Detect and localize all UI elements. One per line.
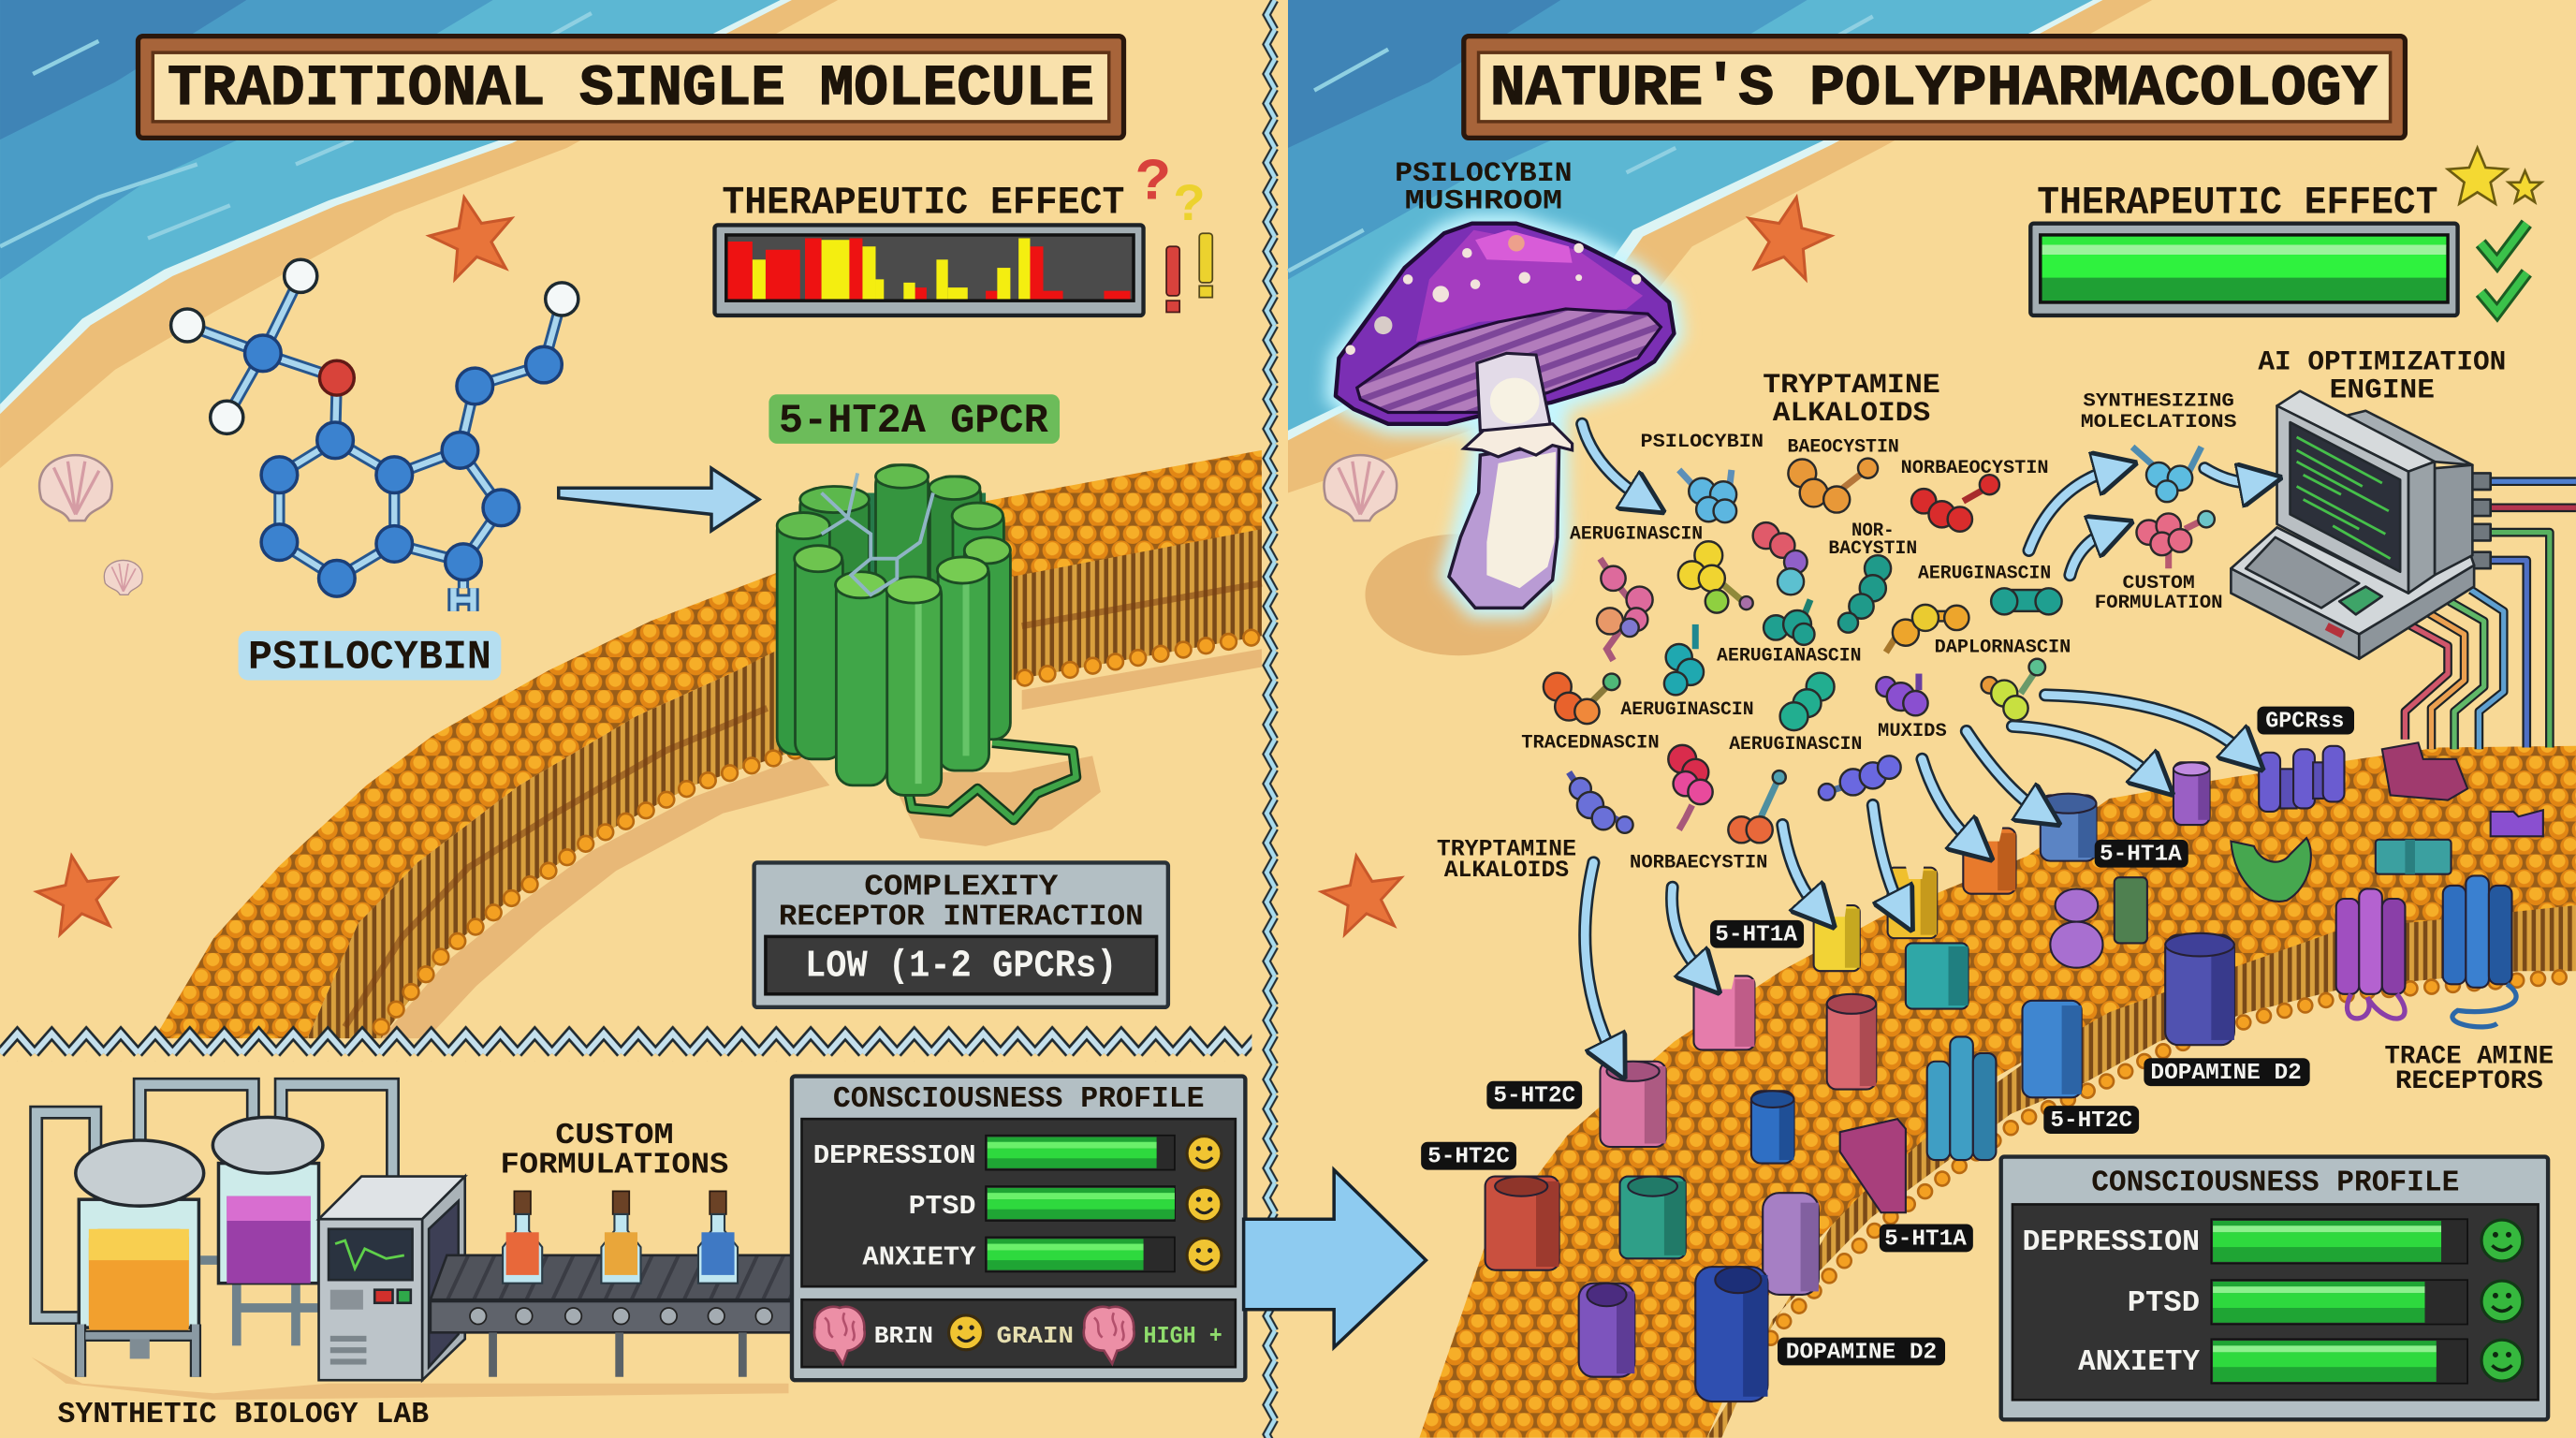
molecule: psilocybin blue <box>1679 470 1736 522</box>
right cell membrane <box>1419 746 2576 1438</box>
left consciousness profile: CONSCIOUSNESS PROFILE <box>833 1083 1204 1116</box>
receptor callout tags: 5-HT2C <box>2050 1108 2132 1134</box>
molecule: teal dumbbell <box>1991 588 2062 614</box>
molecule: blue violet <box>1569 772 1633 833</box>
custom formulations label <box>500 1120 728 1181</box>
molecule name labels: FORMULATION <box>2095 593 2223 614</box>
5-HT2A GPCR receptor bundle <box>777 465 1076 820</box>
mushroom glow <box>1336 224 1674 608</box>
left therapeutic effect meter: THERAPEUTIC EFFECT <box>722 180 1124 225</box>
receptor: top blue <box>2041 794 2096 861</box>
complexity panel: LOW (1-2 GPCRs) <box>805 945 1117 988</box>
computer connectors <box>2471 473 2491 568</box>
molecule: teal lower <box>1664 624 1704 695</box>
vertical zigzag divider <box>1251 0 1288 1438</box>
receptor: salmon <box>1827 994 1876 1090</box>
AI optimization engine label: ENGINE <box>2330 374 2435 405</box>
molecule: orange red <box>1544 673 1620 724</box>
molecule name labels: NOR- <box>1852 521 1895 542</box>
receptor: green <box>2231 838 2311 902</box>
ptsd row <box>909 1186 1222 1222</box>
orange vessel <box>76 1140 204 1377</box>
psilocybin label: PSILOCYBIN <box>248 635 491 682</box>
complexity panel <box>754 862 1168 1007</box>
anxiety row <box>862 1238 1222 1273</box>
receptor: purple notch <box>2491 810 2543 836</box>
decorative starfish and shell, right <box>1316 189 1837 937</box>
receptor callout tags: 5-HT1A <box>1884 1226 1968 1252</box>
lower stem <box>1449 444 1559 608</box>
icons: question and exclamation marks <box>1135 149 1212 312</box>
depression row: DEPRESSION <box>2022 1226 2200 1259</box>
cap <box>1336 224 1674 424</box>
molecule name labels: BAEOCYSTIN <box>1788 436 1899 458</box>
molecule name labels: MUXIDS <box>1878 721 1947 742</box>
molecule name labels: ALKALOIDS <box>1773 397 1930 429</box>
molecule name labels: AERUGINASCIN <box>1570 523 1703 545</box>
gills <box>1357 309 1661 413</box>
receptor: red <box>1486 1177 1559 1270</box>
left beach ocean <box>0 0 838 468</box>
transition arrow <box>1244 1170 1426 1347</box>
brain grain high legend: BRIN <box>874 1323 933 1350</box>
icons: stars and check marks <box>2448 148 2541 312</box>
molecule name labels: NORBAEOCYSTIN <box>1901 458 2049 479</box>
custom formulations label: CUSTOM <box>555 1120 674 1152</box>
analyzer machine <box>319 1177 465 1380</box>
colourful alkaloid molecules <box>1544 447 2215 843</box>
molecule name labels: SYNTHESIZING <box>2083 390 2234 412</box>
molecule: baeocystin orange <box>1788 459 1878 513</box>
receptor: indigo <box>2165 933 2234 1045</box>
receptor callout tags: GPCRss <box>2265 709 2344 734</box>
left therapeutic effect meter <box>714 180 1144 315</box>
receptor: lavender <box>1763 1193 1819 1295</box>
computer base <box>2231 568 2359 659</box>
receptor: bright blue <box>2022 1001 2082 1097</box>
receptor callout tags: 5-HT1A <box>2100 843 2183 868</box>
molecule name labels <box>1437 369 2237 884</box>
AI optimization engine computer <box>2231 391 2576 749</box>
molecule name labels: AERUGINASCIN <box>1620 699 1754 721</box>
lab pipes <box>37 1084 393 1318</box>
psilocybin molecule <box>171 259 578 611</box>
receptor callout tags: 5-HT2C <box>1427 1145 1510 1170</box>
receptor: gold <box>1888 866 1937 938</box>
molecule: custom formulation pink <box>2136 511 2215 568</box>
trace amine receptors label: TRACE AMINE <box>2384 1043 2554 1072</box>
molecule name labels: MOLECLATIONS <box>2081 412 2237 433</box>
computer monitor <box>2346 411 2472 465</box>
molecule: red pink <box>1668 745 1713 829</box>
receptor: trace amine blue <box>2443 875 2516 1027</box>
molecule name labels: AERUGINASCIN <box>1729 734 1862 756</box>
cap spots <box>1345 235 1641 355</box>
conveyor belt <box>431 1255 792 1377</box>
psilocybin mushroom <box>1336 224 1674 655</box>
molecule: orange chain <box>1728 770 1786 843</box>
synthetic biology lab label: SYNTHETIC BIOLOGY LAB <box>57 1399 429 1431</box>
psilocybin mushroom label <box>1395 157 1573 217</box>
complexity panel: RECEPTOR INTERACTION <box>779 901 1144 933</box>
formulation bottles <box>503 1191 738 1284</box>
decorative starfish and shells, left <box>32 189 521 937</box>
molecule name labels: BACYSTIN <box>1828 538 1917 560</box>
arrow: molecule to receptor <box>559 468 759 531</box>
receptor callout tags: 5-HT1A <box>1715 923 1798 948</box>
molecule: yellow lime <box>1678 541 1753 613</box>
icons: question and exclamation marks: ? <box>1135 149 1171 216</box>
depression row <box>813 1136 1222 1171</box>
molecule: lime <box>1982 659 2045 721</box>
molecule name labels: TRYPTAMINE <box>1763 369 1940 401</box>
molecule name labels: DAPLORNASCIN <box>1935 638 2071 659</box>
right therapeutic effect meter: THERAPEUTIC EFFECT <box>2037 180 2438 225</box>
purple vessel <box>200 1117 323 1345</box>
right therapeutic effect meter <box>2030 180 2458 315</box>
molecule: teal chain upper <box>1838 555 1891 633</box>
membrane receptors <box>1486 742 2543 1401</box>
receptor: navy <box>1695 1267 1767 1401</box>
trace amine receptors label: RECEPTORS <box>2395 1067 2543 1096</box>
depression row <box>2022 1219 2523 1264</box>
molecule name labels: TRYPTAMINE <box>1437 837 1576 862</box>
receptor: teal green <box>1620 1177 1686 1258</box>
upper stem <box>1477 353 1551 431</box>
title: traditional single molecule: TRADITIONAL SINGLE MOLECULE <box>168 57 1094 122</box>
molecule: red purple cyan <box>1753 522 1808 594</box>
title: nature's polypharmacology: NATURE'S POLYPHARMACOLOGY <box>1490 57 2378 122</box>
molecule name labels: CUSTOM <box>2123 573 2195 594</box>
molecule: violet blue <box>1819 756 1901 800</box>
ptsd row <box>2128 1280 2523 1325</box>
title: nature's polypharmacology <box>1464 37 2405 138</box>
receptor: yellow <box>1814 903 1860 971</box>
receptor callout tags: DOPAMINE D2 <box>2150 1061 2302 1086</box>
stem ruffle <box>1464 424 1573 457</box>
anxiety row <box>2078 1339 2523 1384</box>
receptor: orange <box>1963 827 2015 894</box>
molecule: norbaeocystin red <box>1911 475 1999 532</box>
molecule name labels: AERUGINASCIN <box>1918 564 2051 585</box>
molecule: synthesized cyan <box>2132 447 2202 502</box>
curved pathway arrows <box>1582 424 2261 1060</box>
receptor: blue small <box>1751 1091 1794 1164</box>
molecule name labels: AERUGIANASCIN <box>1717 645 1862 667</box>
receptor: maroon blob <box>2382 742 2467 800</box>
receptor: small purple <box>2174 762 2210 825</box>
icons: question and exclamation marks: ? <box>1174 176 1206 236</box>
lab shadow <box>31 1357 788 1400</box>
receptor: olive <box>2115 877 2147 943</box>
molecule: purple <box>1876 674 1928 715</box>
right consciousness profile <box>2001 1157 2548 1419</box>
5-HT2A GPCR label: 5-HT2A GPCR <box>779 398 1048 445</box>
title: traditional single molecule <box>138 37 1123 138</box>
receptor: trace amine purple <box>2336 888 2405 1019</box>
brain grain high legend <box>814 1307 1222 1364</box>
computer cables <box>2405 481 2576 749</box>
brain grain high legend: GRAIN <box>996 1323 1074 1350</box>
receptor: light pink <box>1600 1062 1666 1147</box>
brain grain high legend: HIGH + <box>1144 1323 1222 1350</box>
receptor: teal blue bundle <box>1927 1036 1996 1160</box>
molecule name labels: ALKALOIDS <box>1444 858 1569 884</box>
AI optimization engine label: AI OPTIMIZATION <box>2258 346 2506 378</box>
trace amine receptors label <box>2384 1043 2554 1096</box>
receptor callout tags: 5-HT2C <box>1493 1084 1575 1109</box>
docked molecule inside receptor <box>822 473 933 594</box>
right beach ocean <box>1288 0 2152 493</box>
custom formulations label: FORMULATIONS <box>500 1149 728 1181</box>
anxiety row: ANXIETY <box>862 1242 976 1273</box>
complexity panel: COMPLEXITY <box>864 872 1058 904</box>
ptsd row: PTSD <box>2128 1287 2200 1320</box>
receptor: lilac pair <box>2050 888 2102 968</box>
ptsd row: PTSD <box>909 1191 976 1222</box>
receptor: purple <box>1579 1284 1634 1377</box>
receptor callout tags: DOPAMINE D2 <box>1786 1340 1937 1365</box>
left cell membrane <box>154 450 1262 1038</box>
molecule: teal chain middle <box>1764 600 1814 645</box>
left consciousness profile <box>792 1077 1245 1380</box>
mushroom shadow <box>1365 534 1553 655</box>
receptor: magenta <box>1840 1119 1906 1212</box>
depression row: DEPRESSION <box>813 1140 976 1171</box>
molecule name labels: TRACEDNASCIN <box>1521 732 1660 754</box>
receptor callout tags <box>1421 707 2354 1365</box>
psilocybin mushroom label: PSILOCYBIN <box>1395 157 1573 189</box>
receptor: teal notch <box>1906 943 1969 1009</box>
anxiety row: ANXIETY <box>2078 1346 2200 1379</box>
receptor: violet bundle <box>2259 746 2344 812</box>
psilocybin mushroom label: MUSHROOM <box>1405 185 1562 217</box>
synthetic biology lab <box>31 1084 792 1400</box>
molecule name labels: PSILOCYBIN <box>1640 432 1764 453</box>
receptor: flat teal <box>2376 840 2452 874</box>
horizontal zigzag divider <box>0 1025 1251 1062</box>
molecule: sea green <box>1780 673 1835 730</box>
molecule: daplornascin yellow orange <box>1886 605 1969 653</box>
receptor tail loop <box>909 742 1076 820</box>
AI optimization engine label <box>2258 346 2506 405</box>
molecule: magenta chain <box>1597 559 1653 661</box>
molecule name labels: NORBAECYSTIN <box>1630 852 1767 873</box>
receptor: pink notch <box>1693 975 1754 1049</box>
right consciousness profile: CONSCIOUSNESS PROFILE <box>2091 1167 2459 1200</box>
